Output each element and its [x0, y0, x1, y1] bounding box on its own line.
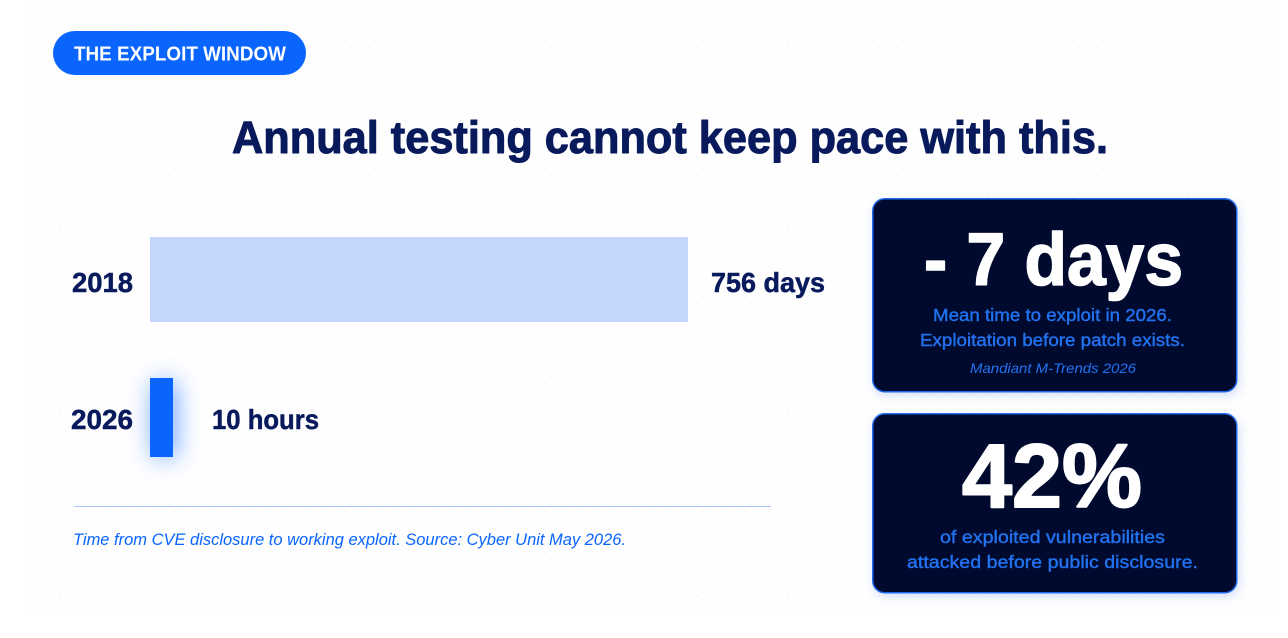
bar chart: time to exploit [71, 237, 825, 506]
bar row: 2018: 756 days [711, 267, 825, 298]
bar row: 2026: 2026 [71, 404, 133, 435]
stat card: minus 7 days: Mandiant M-Trends 2026 [970, 360, 1136, 376]
bar row: 2026 [71, 378, 319, 457]
bar row: 2018: 2018 [72, 267, 133, 298]
bar row: 2018 [72, 237, 825, 322]
chart source caption: Time from CVE disclosure to working exploit. Source: Cyber Unit May 2026. [73, 531, 626, 549]
badge: the exploit window: THE EXPLOIT WINDOW [74, 44, 286, 66]
stat card: 42 percent: of exploited vulnerabilities [940, 527, 1165, 547]
stat card: 42 percent: 42% [962, 427, 1142, 527]
stat card: minus 7 days: - 7 days [924, 218, 1183, 301]
bar row: 2026: 10 hours [212, 404, 319, 435]
stat card: 42 percent: attacked before public disclosure. [907, 552, 1198, 572]
stat card: minus 7 days [873, 199, 1239, 395]
stat card: minus 7 days: Mean time to exploit in 2026. [933, 305, 1172, 325]
stat card: minus 7 days: Exploitation before patch exists. [920, 330, 1185, 350]
title: Annual testing cannot keep pace with this. [232, 112, 1108, 163]
stat card: 42 percent [873, 414, 1239, 596]
badge: the exploit window [53, 31, 306, 75]
